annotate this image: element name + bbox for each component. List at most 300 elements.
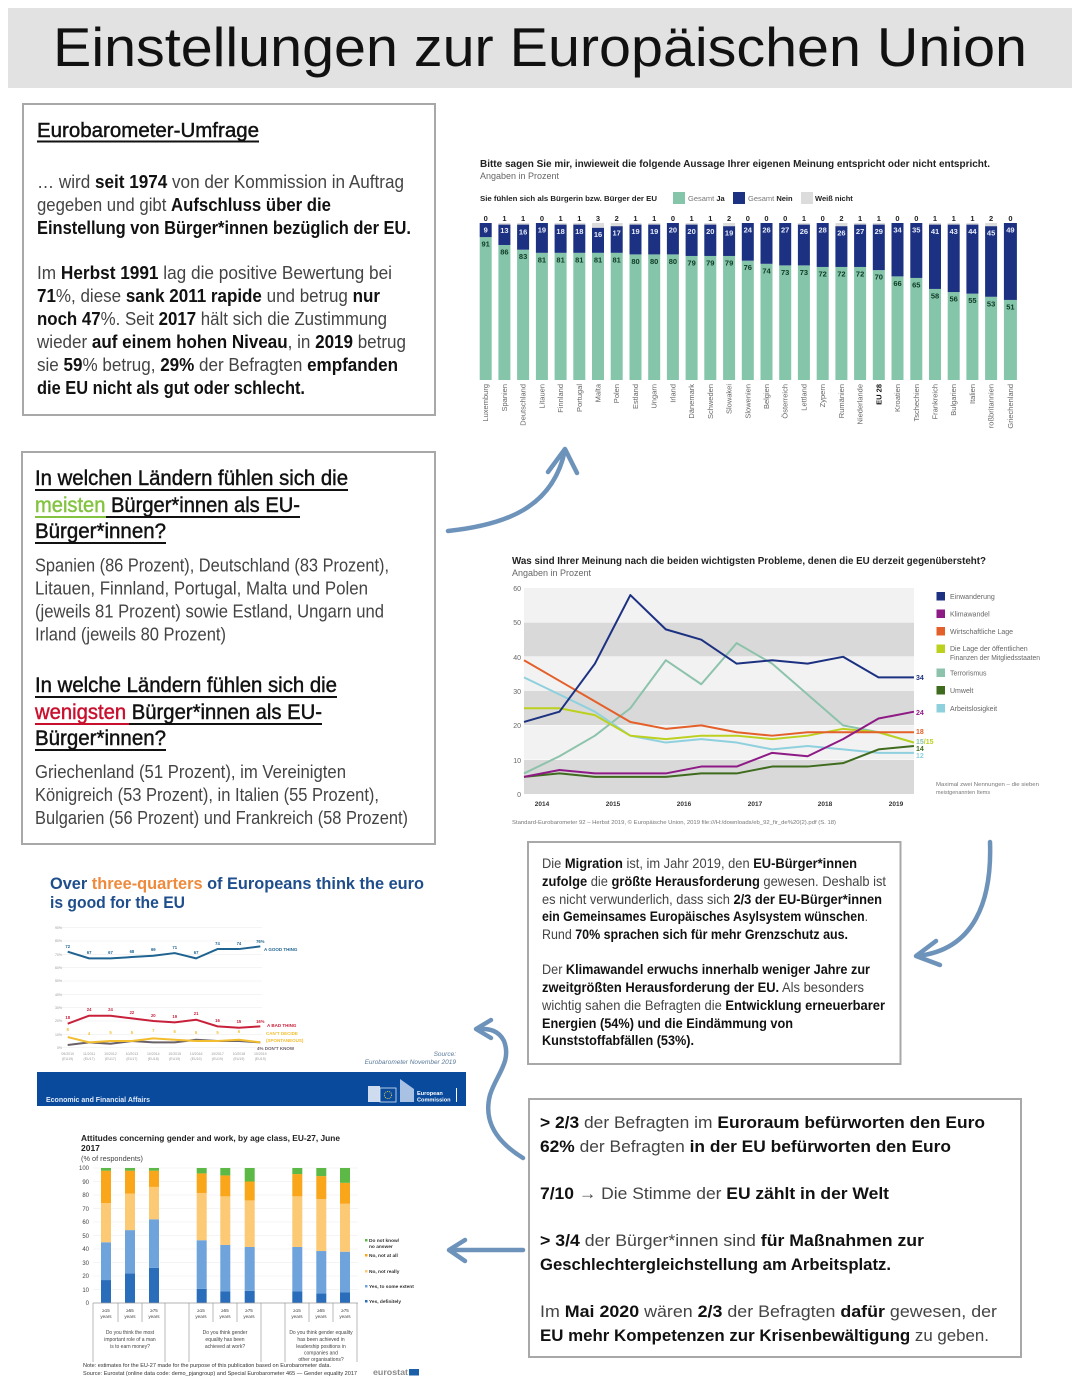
stacked bar chart: gender and work <box>79 1133 419 1377</box>
x axis labels: 09/2010 <box>61 1052 74 1056</box>
country labels: Tschechien <box>912 384 921 422</box>
age class labels: years <box>219 1314 231 1319</box>
icon: European Commission logo: Commission <box>417 1098 451 1104</box>
navy value labels: 26 <box>800 227 808 236</box>
line data labels: 5 <box>195 1030 198 1035</box>
top labels: weiß nicht: 1 <box>802 214 806 223</box>
x axis labels: 2019 <box>889 801 904 808</box>
line data labels: 71 <box>172 945 178 950</box>
legend: Yes, to some extent <box>369 1284 414 1290</box>
country labels: Rumänien <box>837 384 846 418</box>
question labels: is to earn money? <box>110 1344 150 1350</box>
line data labels: 24 <box>87 1007 92 1012</box>
x axis labels: (EU19) <box>212 1057 223 1061</box>
panel: Eurobarometer-Umfrage: gegeben und gibt Aufschluss über die <box>37 195 331 215</box>
legend: Einwanderung <box>950 594 995 601</box>
x axis labels: (EU19) <box>62 1057 73 1061</box>
line end labels: 15/15 <box>916 739 934 746</box>
top labels: weiß nicht: 0 <box>540 214 544 223</box>
green value labels: 72 <box>819 270 827 278</box>
age class labels: ≥55 <box>317 1308 325 1313</box>
x axis labels: 10/2013 <box>126 1052 138 1056</box>
heading: wenigsten: wenigsten Bürger*innen als EU- <box>34 701 322 724</box>
line data labels: 67 <box>194 950 199 955</box>
country labels: Slowakei <box>725 384 734 414</box>
panel: Migration und Klimawandel: Kunststoffabfällen (53%). <box>542 1032 694 1048</box>
age class labels: ≥75 <box>341 1308 349 1313</box>
x axis labels: 10/2014 <box>147 1052 160 1056</box>
age class labels: years <box>148 1314 160 1319</box>
lines <box>68 946 260 1045</box>
x axis labels: 10/2015 <box>168 1052 181 1056</box>
age class labels: years <box>243 1314 255 1319</box>
x axis labels: 10/2019 <box>254 1052 267 1056</box>
country labels: Irland <box>668 384 677 403</box>
panel: Euro, Stimme und Kompetenzen: EU mehr Kompetenzen zur Krisenbewältigung zu geben. <box>540 1326 989 1345</box>
line end labels <box>916 675 934 760</box>
panel: Migration und Klimawandel: Die Migration ist, im Jahr 2019, den EU-Bürger*innen <box>542 855 857 871</box>
line data labels: 67 <box>108 950 113 955</box>
panel: Eurobarometer-Umfrage: Im Herbst 1991 lag die positive Bewertung bei <box>37 263 392 283</box>
line series labels: (SPONTANEOUS) <box>266 1038 304 1043</box>
age class labels: ≥75 <box>245 1308 253 1313</box>
line data labels: 74 <box>215 941 220 946</box>
navy value labels: 45 <box>987 228 995 238</box>
legend: Sie fühlen sich als Bürgerin bzw. Bürger der EU <box>480 194 657 203</box>
chart title: Over three-quarters of Europeans think the euro <box>50 875 424 893</box>
age class labels: ≥15 <box>197 1308 205 1313</box>
y axis labels: 40% <box>55 993 62 997</box>
green value labels: 79 <box>687 258 696 268</box>
chart title: Bitte sagen Sie mir, inwieweit die folgende Aussage Ihrer eigenen Meinung entspricht oder nicht entspricht. <box>480 158 990 170</box>
x axis labels: (EU19) <box>191 1057 202 1061</box>
y axis labels: 60 <box>513 586 521 593</box>
age class labels: years <box>195 1314 207 1319</box>
panel: countries most and least <box>22 452 435 844</box>
y axis labels: 70% <box>55 953 62 957</box>
x axis labels: 2015 <box>606 801 621 808</box>
top labels: weiß nicht: 0 <box>764 214 769 223</box>
age class labels: years <box>100 1314 112 1319</box>
panel: Euro, Stimme und Kompetenzen: 7/10 → Die Stimme der EU zählt in der Welt <box>540 1184 889 1203</box>
navy value labels: 19 <box>538 226 546 234</box>
x axis labels <box>61 1052 267 1061</box>
navy value labels: 19 <box>725 228 733 238</box>
navy value labels: 19 <box>631 227 640 236</box>
navy value labels: 41 <box>931 227 939 236</box>
line data labels: 69 <box>151 947 156 952</box>
line data labels: 18 <box>65 1015 71 1020</box>
x axis labels: 2016 <box>677 801 692 808</box>
question labels: Do you think the most <box>106 1330 155 1336</box>
x axis labels: (EU18) <box>148 1057 159 1061</box>
green value labels: 66 <box>893 279 902 288</box>
text: meisten list: Litauen, Finnland, Portugal, Malta und Polen <box>35 578 368 598</box>
y axis labels: 10 <box>82 1288 90 1294</box>
text: meisten list: Irland (jeweils 80 Prozent) <box>35 624 226 644</box>
green value labels: 58 <box>931 292 939 300</box>
legend <box>365 1238 414 1305</box>
top labels: weiß nicht: 0 <box>746 214 750 223</box>
country labels: Frankreich <box>930 384 940 419</box>
country labels: Lettland <box>799 384 808 411</box>
text: meisten list: (jeweils 81 Prozent) sowie Estland, Ungarn und <box>35 602 384 622</box>
navy value labels: 27 <box>856 227 864 236</box>
legend: Gesamt Ja <box>688 194 726 203</box>
heading: meisten <box>35 467 348 544</box>
panel: Migration und Klimawandel: zufolge die größte Herausforderung gewesen. Deshalb ist <box>542 873 886 889</box>
chart note: meistgenannten Items <box>936 790 990 796</box>
panel: Eurobarometer-Umfrage: noch 47%. Seit 2017 hält sich die Zustimmung <box>37 309 387 329</box>
age class labels: years <box>315 1314 327 1319</box>
top labels: weiß nicht: 1 <box>559 214 563 223</box>
question labels: has been achieved in <box>297 1337 345 1343</box>
text: wenigsten list: Bulgarien (56 Prozent) und Frankreich (58 Prozent) <box>35 808 408 828</box>
legend: Yes, definitely <box>369 1299 401 1305</box>
line data labels: 68 <box>130 949 135 954</box>
y axis labels: 80% <box>55 939 62 943</box>
green value labels: 76 <box>744 263 752 272</box>
top labels: weiß nicht: 1 <box>877 214 881 223</box>
green value labels: 80 <box>631 257 640 266</box>
green value labels: 91 <box>482 240 490 248</box>
legend: Weiß nicht <box>815 194 853 203</box>
y axis labels: 30% <box>55 1006 62 1010</box>
green value labels: 81 <box>575 255 583 264</box>
green value labels: 72 <box>856 270 864 278</box>
green value labels: 79 <box>706 258 714 268</box>
arrow: down to migration panel <box>916 842 990 965</box>
legend: Klimawandel <box>950 612 990 618</box>
green value labels: 81 <box>613 255 621 264</box>
green value labels: 73 <box>781 268 789 277</box>
line data labels: 5 <box>109 1030 112 1035</box>
top labels: weiß nicht: 1 <box>858 214 862 223</box>
y axis labels: 50 <box>82 1234 90 1240</box>
navy value labels: 20 <box>687 227 696 236</box>
navy value labels: 44 <box>968 227 977 236</box>
arrow: wavy up to euro chart <box>476 1020 523 1158</box>
chart title <box>81 1133 340 1163</box>
navy value labels: 28 <box>819 226 827 234</box>
line series labels: 4% DON'T KNOW <box>257 1046 295 1051</box>
chart note and source: Source: Eurostat (online data code: demo_pjangroup) and Special Eurobarometer 465 — Gender equality 2017 <box>83 1371 357 1377</box>
panel: Eurobarometer-Umfrage: Einstellung von Bürger*innen bezüglich der EU. <box>37 218 411 238</box>
line end labels: 14 <box>916 746 924 753</box>
question labels: Do you think gender equality <box>289 1330 353 1336</box>
chart title: Angaben in Prozent <box>480 171 559 181</box>
chart: euro is good for the EU <box>37 875 466 1106</box>
title banner: Einstellungen zur Europäischen Union <box>53 16 1027 78</box>
x axis labels: (EU17) <box>84 1057 95 1061</box>
legend: Umwelt <box>950 688 973 695</box>
green value labels: 72 <box>837 270 846 278</box>
green value labels: 55 <box>968 296 977 305</box>
country labels: Niederlande <box>856 384 865 424</box>
navy value labels: 34 <box>893 226 902 234</box>
legend: Do not know/ <box>369 1238 400 1244</box>
country labels: Griechenland <box>1006 384 1015 429</box>
arrow: left to gender chart <box>449 1240 523 1261</box>
x axis labels: 10/2018 <box>233 1052 245 1056</box>
top labels: weiß nicht: 1 <box>652 214 656 223</box>
country labels: Spanien <box>500 384 509 412</box>
heading: wenigsten <box>34 674 337 751</box>
chart title <box>512 556 986 578</box>
country labels: Dänemark <box>687 384 696 419</box>
line data labels: 5 <box>216 1030 219 1035</box>
legend <box>936 592 1040 713</box>
navy value labels: 18 <box>575 227 583 236</box>
country labels <box>481 383 1015 429</box>
legend: Die Lage der öffentlichen <box>950 646 1028 653</box>
age class labels: years <box>339 1314 351 1319</box>
top labels: weiß nicht: 2 <box>727 214 731 223</box>
age class labels: years <box>124 1314 136 1319</box>
line data labels: 16 <box>215 1018 220 1023</box>
x axis labels: (EU17) <box>126 1057 137 1061</box>
navy value labels: 20 <box>706 227 714 236</box>
top labels: weiß nicht: 1 <box>952 214 956 223</box>
navy value labels: 26 <box>762 226 771 234</box>
navy value labels: 9 <box>484 226 488 234</box>
eurostat logo <box>373 1368 419 1377</box>
y axis labels: 90 <box>82 1180 90 1186</box>
line series labels: CAN'T DECIDE <box>266 1031 298 1036</box>
y axis labels: 60% <box>55 966 62 970</box>
source <box>365 1051 456 1066</box>
panel: Euro, Stimme und Kompetenzen: > 2/3 der Befragten im Euroraum befürworten den Euro <box>540 1113 985 1132</box>
question labels: achieved at work? <box>205 1344 245 1350</box>
y axis labels: 40 <box>82 1247 90 1253</box>
question labels: companies and <box>304 1350 338 1356</box>
y axis labels: 20 <box>513 723 521 730</box>
line data labels: 16% <box>256 1019 265 1024</box>
y axis labels: 20 <box>82 1274 90 1280</box>
x axis labels: 10/2017 <box>211 1052 224 1056</box>
top labels: weiß nicht: 1 <box>690 214 694 223</box>
navy value labels: 27 <box>781 226 789 234</box>
y axis labels: 10 <box>513 758 521 765</box>
y axis labels: 50% <box>55 979 62 983</box>
question labels <box>104 1330 353 1363</box>
navy value labels: 29 <box>875 227 883 236</box>
line data labels: 76% <box>256 939 265 944</box>
heading: wenigsten: In welche Ländern fühlen sich die <box>35 674 337 697</box>
eurostat logo: eurostat <box>373 1368 408 1377</box>
line data labels <box>65 939 265 1036</box>
y axis labels: 40 <box>513 655 521 662</box>
question labels: Do you think gender <box>203 1330 248 1336</box>
text: meisten list <box>35 556 389 644</box>
country labels: Polen <box>612 384 621 403</box>
y axis labels: 10% <box>55 1033 62 1037</box>
country labels: Luxemburg <box>481 384 490 422</box>
panel: Migration und Klimawandel: Energien (54%) und die Eindämmung von <box>542 1015 793 1031</box>
line data labels: 8 <box>67 1027 70 1032</box>
chart title: Angaben in Prozent <box>512 568 591 578</box>
navy value labels: 19 <box>650 227 658 236</box>
navy value labels: 16 <box>519 228 527 236</box>
legend: Gesamt Nein <box>748 194 793 203</box>
chart source: Standard-Eurobarometer 92 – Herbst 2019, © Europäische Union, 2019 file:///H:/downloads/eb_92_fir_de%20(2).pdf (S. 18) <box>512 819 836 826</box>
top labels: weiß nicht: 2 <box>839 214 843 223</box>
category frame lines <box>93 1303 358 1362</box>
x axis labels: 2018 <box>818 801 833 808</box>
green value labels: 81 <box>594 255 602 264</box>
line data labels: 4 <box>88 1031 91 1036</box>
line data labels: 21 <box>194 1011 199 1016</box>
x axis labels: 10/2012 <box>104 1052 117 1056</box>
panel: Eurobarometer-Umfrage: … wird seit 1974 von der Kommission in Auftrag <box>37 172 404 192</box>
navy value labels: 24 <box>744 226 753 234</box>
chart note and source <box>83 1363 357 1377</box>
x axis labels: 10/2016 <box>190 1052 202 1056</box>
country labels: Litauen <box>537 384 546 409</box>
x axis labels <box>535 801 904 808</box>
green value labels: 80 <box>669 257 677 266</box>
panel: Euro, Stimme und Kompetenzen: 62% der Befragten in der EU befürworten den Euro <box>540 1137 951 1156</box>
panel: Migration und Klimawandel: wichtig sahen die Befragten die Entwicklung erneuerbarer <box>541 997 886 1013</box>
country labels: roßbritannien <box>987 384 996 428</box>
line data labels: 5 <box>131 1030 134 1035</box>
panel: Eurobarometer-Umfrage: Eurobarometer-Umfrage <box>37 120 259 142</box>
text: wenigsten list <box>35 762 408 828</box>
panel: Euro, Stimme und Kompetenzen: > 3/4 der Bürger*innen sind für Maßnahmen zur <box>540 1231 924 1250</box>
data lines <box>524 595 914 777</box>
source: Source: <box>434 1051 456 1058</box>
y axis labels: 0 <box>517 792 521 799</box>
top labels: weiß nicht: 0 <box>671 214 675 223</box>
line data labels: 72 <box>65 944 71 949</box>
plot background bands <box>524 588 914 794</box>
green value labels: 65 <box>912 280 920 290</box>
text: meisten list: Spanien (86 Prozent), Deutschland (83 Prozent), <box>35 556 389 576</box>
green value labels: 83 <box>519 252 527 261</box>
panel: Migration und Klimawandel: ein Gemeinsames Europäisches Asylsystem wünschen. <box>542 908 868 924</box>
country labels: Österreich <box>781 384 790 419</box>
chart note <box>936 782 1039 796</box>
country labels: EU 28 <box>874 384 883 405</box>
navy value labels: 26 <box>837 228 846 238</box>
age class labels <box>100 1308 351 1319</box>
chart title: 2017 <box>81 1143 100 1153</box>
line data labels: 19 <box>172 1014 178 1019</box>
age class labels: ≥15 <box>293 1308 301 1313</box>
age class labels: ≥75 <box>150 1308 158 1313</box>
y axis labels <box>79 1166 90 1307</box>
green value labels <box>482 240 1015 311</box>
age class labels: ≥15 <box>102 1308 110 1313</box>
age class labels: ≥55 <box>126 1308 134 1313</box>
x axis labels: (EU17) <box>105 1057 116 1061</box>
line data labels: 7 <box>152 1028 155 1033</box>
panel: Migration und Klimawandel: es nicht verwunderlich, dass sich 2/3 der EU-Bürger*innen <box>542 891 882 907</box>
chart title <box>480 158 990 181</box>
green value labels: 74 <box>762 266 771 275</box>
chart note and source: Note: estimates for the EU-27 made for the purpose of this publication based on Eurobarometer data. <box>83 1363 331 1369</box>
country labels: Slowenien <box>743 384 752 419</box>
heading: meisten: In welchen Ländern fühlen sich die <box>35 467 348 490</box>
grid lines <box>93 1168 358 1290</box>
green value labels: 53 <box>987 299 995 308</box>
line data labels: 67 <box>87 950 92 955</box>
question labels: equality has been <box>205 1337 245 1343</box>
navy value labels: 16 <box>594 230 602 239</box>
top labels: weiß nicht: 0 <box>895 214 900 223</box>
top labels: weiß nicht: 0 <box>484 214 488 223</box>
legend: No, not at all <box>369 1253 398 1259</box>
y axis labels: 90% <box>55 926 62 930</box>
green value labels: 56 <box>950 295 958 304</box>
navy value labels: 49 <box>1006 226 1015 234</box>
chart title: Attitudes concerning gender and work, by age class, EU-27, June <box>81 1133 340 1143</box>
top labels: weiß nicht: 2 <box>615 214 619 223</box>
country labels: Zypern <box>818 384 827 407</box>
top labels: weiß nicht: 3 <box>596 214 600 223</box>
country labels: Ungarn <box>650 384 659 409</box>
panel: Migration und Klimawandel: Rund 70% sprachen sich für mehr Grenzschutz aus. <box>542 926 848 942</box>
line data labels: 6 <box>174 1029 177 1034</box>
green value labels: 81 <box>556 255 565 264</box>
chart title <box>50 875 424 912</box>
green value labels: 51 <box>1006 302 1015 311</box>
navy value labels: 43 <box>950 227 958 236</box>
navy value labels <box>484 226 1015 239</box>
chart title: (% of respondents) <box>81 1154 143 1163</box>
panel: Eurobarometer-Umfrage <box>23 104 435 415</box>
line end labels: 34 <box>916 675 924 682</box>
line data labels: 74 <box>237 941 242 946</box>
x axis labels: 2014 <box>535 801 550 808</box>
chart title: Was sind Ihrer Meinung nach die beiden wichtigsten Probleme, denen die EU derzeit gegenübersteht? <box>512 556 986 567</box>
footer band <box>37 1072 466 1106</box>
top labels: weiß nicht: 1 <box>933 214 937 223</box>
line series labels <box>257 947 304 1051</box>
top labels: weiß nicht: 1 <box>708 214 712 223</box>
heading: wenigsten: Bürger*innen? <box>35 727 166 750</box>
line end labels: 12 <box>916 753 924 760</box>
green value labels: 81 <box>538 255 546 264</box>
legend: Terrorismus <box>950 670 987 678</box>
question labels: other organisations? <box>298 1357 344 1363</box>
x axis labels: (EU19) <box>169 1057 180 1061</box>
icon: European Commission logo: European <box>417 1091 443 1097</box>
icon: European Commission logo <box>368 1079 457 1104</box>
question labels: important role of a man <box>104 1337 156 1343</box>
green value labels: 79 <box>725 258 733 268</box>
panel: Migration und Klimawandel: Der Klimawandel erwuchs innerhalb weniger Jahre zur <box>542 961 870 977</box>
question labels: leadership positions in <box>296 1344 346 1350</box>
top labels: weiß nicht: 0 <box>914 214 918 223</box>
country labels: Malta <box>594 383 602 402</box>
y axis labels: 30 <box>513 689 521 696</box>
green value labels: 80 <box>650 257 658 266</box>
legend: no answer <box>369 1244 393 1250</box>
top labels: weiß nicht: 0 <box>1008 214 1012 223</box>
green value labels: 70 <box>875 273 883 282</box>
y axis labels: 50 <box>513 620 521 627</box>
x axis labels: 11/2011 <box>83 1052 95 1056</box>
y axis labels: 80 <box>82 1193 90 1199</box>
age class labels: ≥55 <box>221 1308 229 1313</box>
top labels: weiß nicht: 0 <box>821 214 825 223</box>
footer band: Economic and Financial Affairs <box>46 1095 150 1104</box>
line end labels: 24 <box>916 710 924 717</box>
y axis labels <box>55 926 62 1050</box>
top labels: weiß nicht: 1 <box>970 214 974 223</box>
country labels: Belgien <box>762 384 771 409</box>
